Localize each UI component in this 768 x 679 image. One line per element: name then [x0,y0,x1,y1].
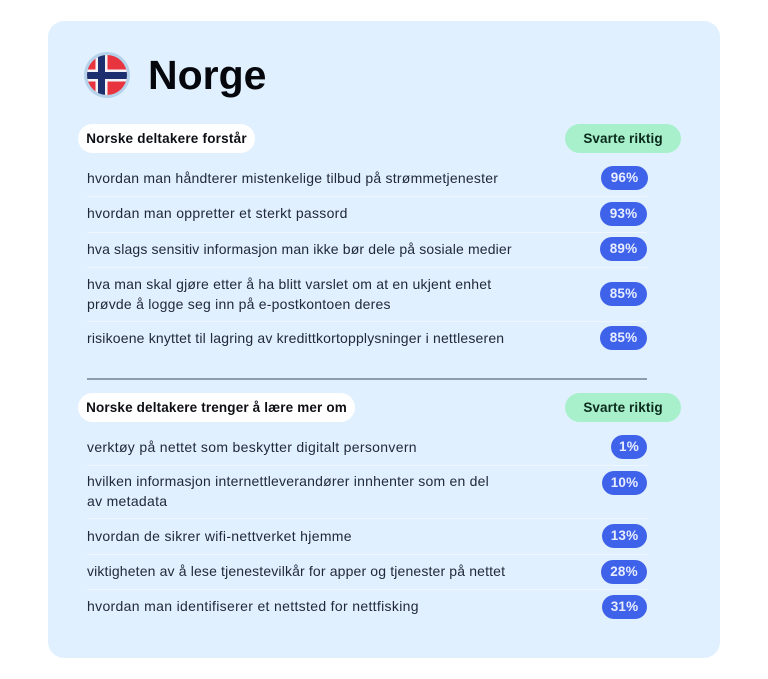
value 31%: 31% [611,599,638,614]
row text 6: verktøy på nettet som beskytter digitalt personvern [87,439,417,455]
row text 1: hvordan man håndterer mistenkelige tilbud på strømmetjenester [87,170,498,186]
row text 7 [87,473,489,509]
title: Norge [148,52,266,98]
row text 4 [87,276,492,312]
row text 3: hva slags sensitiv informasjon man ikke bør dele på sosiale medier [87,241,512,257]
value 96% [601,166,648,190]
value 28%: 28% [610,564,638,579]
value 13%: 13% [611,528,638,543]
row text 5: risikoene knyttet til lagring av kredittkortopplysninger i nettleseren [87,330,504,346]
row text 10: hvordan man identifiserer et nettsted for nettfisking [87,598,419,614]
value 96%: 96% [611,170,638,185]
heading: understood [78,124,255,153]
icon: Norwegian flag [84,52,130,98]
heading: understood: Norske deltakere forstår [86,131,247,146]
value 93%: 93% [610,206,637,221]
value 85%: 85% [610,286,637,301]
value 10%: 10% [611,475,638,490]
value 89%: 89% [610,241,637,256]
value 1% [611,435,647,459]
label: answered correctly, first section [565,124,681,153]
value 28% [601,560,647,584]
row text 8: hvordan de sikrer wifi-nettverket hjemme [87,528,352,544]
value 10% [602,471,647,495]
value 89% [600,237,647,261]
row text 4: prøvde å logge seg inn på e-postkontoen deres [87,296,391,312]
row text 7: av metadata [87,493,167,509]
value 85%: 85% [610,330,637,345]
value 31% [602,595,647,619]
value 85% [600,326,647,350]
label: answered correctly, first section: Svarte riktig [583,131,663,146]
row text 4: hva man skal gjøre etter å ha blitt varslet om at en ukjent enhet [87,276,491,292]
row text 2: hvordan man oppretter et sterkt passord [87,205,348,221]
row text 9: viktigheten av å lese tjenestevilkår for apper og tjenester på nettet [87,563,505,579]
row text 7: hvilken informasjon internettleverandører innhenter som en del [87,473,489,489]
value 13% [602,524,647,548]
label: answered correctly, second section [565,393,681,422]
heading: needs to learn: Norske deltakere trenger å lære mer om [86,400,347,415]
value 85% [600,282,647,306]
value 1%: 1% [619,439,639,454]
label: answered correctly, second section: Svarte riktig [583,400,663,415]
value 93% [600,202,647,226]
heading: needs to learn [78,393,355,422]
